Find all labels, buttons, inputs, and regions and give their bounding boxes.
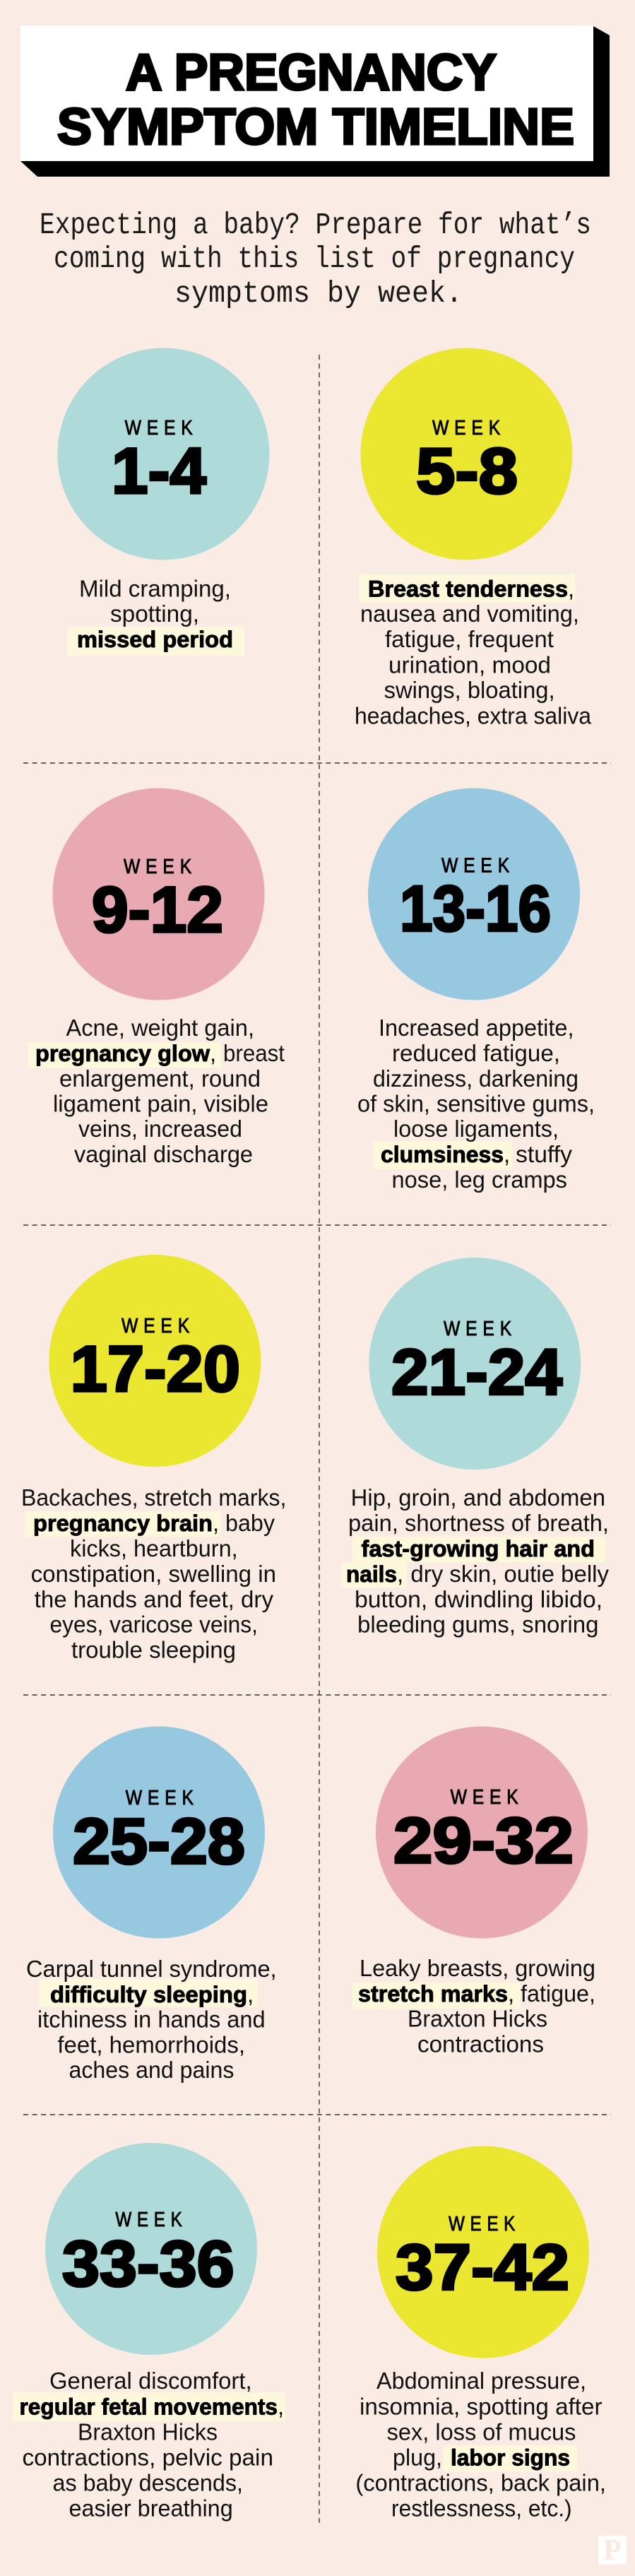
symptoms: week 13-16: loose ligaments, xyxy=(393,1116,559,1142)
badge: week 9-12: 9-12 xyxy=(92,874,223,946)
symptoms: week 1-4 xyxy=(67,576,244,656)
panel: weeks 1-4 xyxy=(57,348,269,656)
banner shadow xyxy=(20,26,610,177)
symptoms: week 17-20: , xyxy=(213,1510,219,1536)
title: A PREGNANCY xyxy=(126,45,497,101)
symptoms: week 9-12: enlargement, round xyxy=(59,1065,261,1092)
panel: weeks 13-16 xyxy=(357,788,595,1193)
title xyxy=(57,45,574,155)
panel: weeks 33-36 xyxy=(13,2143,285,2522)
symptoms: week 5-8: Breast tenderness xyxy=(368,577,568,602)
symptoms: week 1-4: Mild cramping, xyxy=(79,576,231,602)
symptoms: week 9-12: pregnancy glow xyxy=(35,1041,210,1066)
symptoms: week 21-24: fast-growing hair and xyxy=(362,1536,595,1561)
symptoms: week 1-4: missed period xyxy=(77,627,233,652)
symptoms: week 21-24: bleeding gums, snoring xyxy=(357,1612,599,1638)
symptoms: week 25-28: itchiness in hands and xyxy=(37,2006,266,2032)
symptoms: week 13-16: reduced fatigue, xyxy=(392,1040,560,1066)
badge: week 1-4 xyxy=(57,348,269,560)
badge: week 17-20: WEEK xyxy=(121,1315,195,1337)
panel: weeks 9-12 xyxy=(28,788,285,1167)
badge: week 29-32: WEEK xyxy=(451,1786,524,1809)
badge: week 37-42: WEEK xyxy=(449,2213,521,2235)
symptoms: week 37-42: insomnia, spotting after xyxy=(360,2394,603,2420)
badge: week 1-4: WEEK xyxy=(125,417,198,439)
symptoms: week 5-8: swings, bloating, xyxy=(384,677,555,703)
symptoms: week 37-42: Abdominal pressure, xyxy=(376,2368,586,2394)
badge: week 25-28: 25-28 xyxy=(73,1806,245,1878)
symptoms: week 29-32: fatigue, xyxy=(521,1980,595,2007)
badge: week 9-12: WEEK xyxy=(124,856,197,878)
symptoms: week 33-36: , xyxy=(278,2394,284,2420)
symptoms: week 25-28 xyxy=(26,1956,277,2083)
symptoms: week 25-28: aches and pains xyxy=(69,2057,234,2083)
title: SYMPTOM TIMELINE xyxy=(57,99,574,155)
symptoms: week 9-12: breast xyxy=(223,1040,285,1066)
panel: weeks 25-28 xyxy=(26,1727,277,2083)
badge: week 5-8: 5-8 xyxy=(416,435,518,507)
panel: weeks 5-8 xyxy=(355,348,592,729)
symptoms: week 25-28: , xyxy=(247,1981,254,2007)
symptoms: week 29-32: stretch marks xyxy=(358,1981,508,2007)
symptoms: week 37-42: sex, loss of mucus xyxy=(387,2418,576,2445)
symptoms: week 33-36: as baby descends, xyxy=(52,2470,243,2496)
symptoms: week 5-8: urination, mood xyxy=(388,651,551,678)
symptoms: week 5-8: headaches, extra saliva xyxy=(355,702,592,729)
badge: week 5-8: WEEK xyxy=(432,417,506,439)
symptoms: week 33-36: Braxton Hicks xyxy=(78,2418,218,2445)
panel: weeks 37-42 xyxy=(355,2146,606,2522)
symptoms: week 9-12: ligament pain, visible xyxy=(53,1091,268,1116)
symptoms: week 21-24: button, dwindling libido, xyxy=(355,1586,603,1612)
badge: week 17-20: 17-20 xyxy=(71,1333,240,1405)
symptoms: week 33-36: contractions, pelvic pain xyxy=(23,2445,273,2470)
panel: weeks 17-20 xyxy=(21,1255,286,1663)
badge: week 13-16: 13-16 xyxy=(400,873,551,945)
badge: week 5-8 xyxy=(360,348,572,560)
symptoms: week 21-24: pain, shortness of breath, xyxy=(348,1510,609,1536)
badge: week 21-24: WEEK xyxy=(444,1318,517,1340)
symptoms: week 33-36: easier breathing xyxy=(69,2495,233,2522)
badge: week 33-36 xyxy=(45,2143,257,2355)
symptoms: week 21-24 xyxy=(341,1484,609,1638)
badge: week 25-28: WEEK xyxy=(126,1787,199,1809)
symptoms: week 25-28: feet, hemorrhoids, xyxy=(57,2032,245,2057)
panel: weeks 21-24 xyxy=(341,1258,609,1638)
symptoms: week 17-20: eyes, varicose veins, xyxy=(49,1612,258,1638)
symptoms: week 5-8 xyxy=(355,574,592,729)
symptoms: week 33-36: General discomfort, xyxy=(49,2368,252,2394)
symptoms: week 37-42: labor signs xyxy=(451,2445,570,2470)
symptoms: week 37-42: restlessness, etc.) xyxy=(391,2495,572,2522)
badge: week 21-24 xyxy=(369,1258,581,1470)
symptoms: week 13-16: of skin, sensitive gums, xyxy=(357,1091,595,1116)
badge: week 29-32 xyxy=(376,1727,588,1939)
symptoms: week 29-32: Leaky breasts, growing xyxy=(360,1955,595,1981)
symptoms: week 29-32: contractions xyxy=(417,2031,544,2057)
symptoms: week 21-24: , xyxy=(397,1561,403,1587)
symptoms: week 9-12: vaginal discharge xyxy=(74,1141,253,1167)
badge: week 17-20 xyxy=(49,1255,261,1467)
badge: week 37-42 xyxy=(377,2146,589,2358)
symptoms: week 5-8: nausea and vomiting, xyxy=(360,601,579,627)
symptoms: week 17-20: trouble sleeping xyxy=(71,1636,236,1663)
badge: week 9-12 xyxy=(52,788,264,1000)
symptoms: week 13-16: nose, leg cramps xyxy=(391,1166,567,1193)
intro text xyxy=(40,208,591,311)
symptoms: week 25-28: difficulty sleeping xyxy=(50,1982,247,2007)
symptoms: week 29-32: , xyxy=(508,1980,514,2007)
badge: week 29-32: 29-32 xyxy=(393,1804,574,1877)
symptoms: week 17-20: constipation, swelling in xyxy=(31,1561,276,1587)
logo: P xyxy=(603,2534,622,2567)
symptoms: week 17-20: pregnancy brain xyxy=(33,1511,213,1536)
badge: week 37-42: 37-42 xyxy=(396,2231,569,2303)
symptoms: week 13-16: , xyxy=(504,1141,510,1167)
badge: week 1-4: 1-4 xyxy=(112,435,206,507)
banner panel xyxy=(20,25,593,161)
symptoms: week 37-42: (contractions, back pain, xyxy=(355,2470,606,2496)
intro text: symptoms by week. xyxy=(174,276,463,311)
symptoms: week 9-12 xyxy=(28,1015,285,1167)
symptoms: week 13-16: dizziness, darkening xyxy=(373,1065,578,1092)
badge: week 13-16: WEEK xyxy=(441,855,515,878)
symptoms: week 29-32: Braxton Hicks xyxy=(408,2006,547,2032)
symptoms: week 13-16: Increased appetite, xyxy=(379,1015,574,1041)
symptoms: week 37-42: plug, xyxy=(393,2445,442,2470)
symptoms: week 9-12: Acne, weight gain, xyxy=(66,1015,254,1041)
badge: week 21-24: 21-24 xyxy=(391,1337,562,1409)
symptoms: week 37-42 xyxy=(355,2368,606,2522)
symptoms: week 5-8: , xyxy=(568,576,574,602)
symptoms: week 17-20: baby xyxy=(225,1510,275,1536)
symptoms: week 21-24: Hip, groin, and abdomen xyxy=(351,1484,605,1511)
title banner xyxy=(20,25,610,177)
symptoms: week 13-16: stuffy xyxy=(516,1141,573,1167)
symptoms: week 13-16 xyxy=(357,1015,595,1193)
badge: week 25-28 xyxy=(53,1727,265,1939)
symptoms: week 5-8: fatigue, frequent xyxy=(385,626,554,652)
symptoms: week 13-16: clumsiness xyxy=(381,1142,504,1167)
badge: week 33-36: 33-36 xyxy=(62,2228,235,2300)
symptoms: week 33-36 xyxy=(13,2368,285,2522)
panel: weeks 29-32 xyxy=(352,1727,595,2057)
badge: week 13-16 xyxy=(368,788,580,1000)
symptoms: week 9-12: , xyxy=(210,1040,216,1066)
symptoms: week 17-20 xyxy=(21,1484,286,1663)
symptoms: week 9-12: veins, increased xyxy=(78,1116,242,1142)
symptoms: week 17-20: kicks, heartburn, xyxy=(70,1535,238,1561)
symptoms: week 17-20: the hands and feet, dry xyxy=(35,1586,273,1612)
symptoms: week 1-4: spotting, xyxy=(110,601,199,627)
symptoms: week 17-20: Backaches, stretch marks, xyxy=(21,1484,286,1511)
symptoms: week 21-24: nails xyxy=(346,1561,397,1587)
symptoms: week 21-24: dry skin, outie belly xyxy=(410,1561,609,1587)
badge: week 33-36: WEEK xyxy=(115,2209,187,2231)
symptoms: week 33-36: regular fetal movements xyxy=(20,2394,278,2420)
symptoms: week 25-28: Carpal tunnel syndrome, xyxy=(26,1956,277,1982)
symptoms: week 29-32 xyxy=(352,1955,595,2057)
logo xyxy=(598,2534,627,2567)
